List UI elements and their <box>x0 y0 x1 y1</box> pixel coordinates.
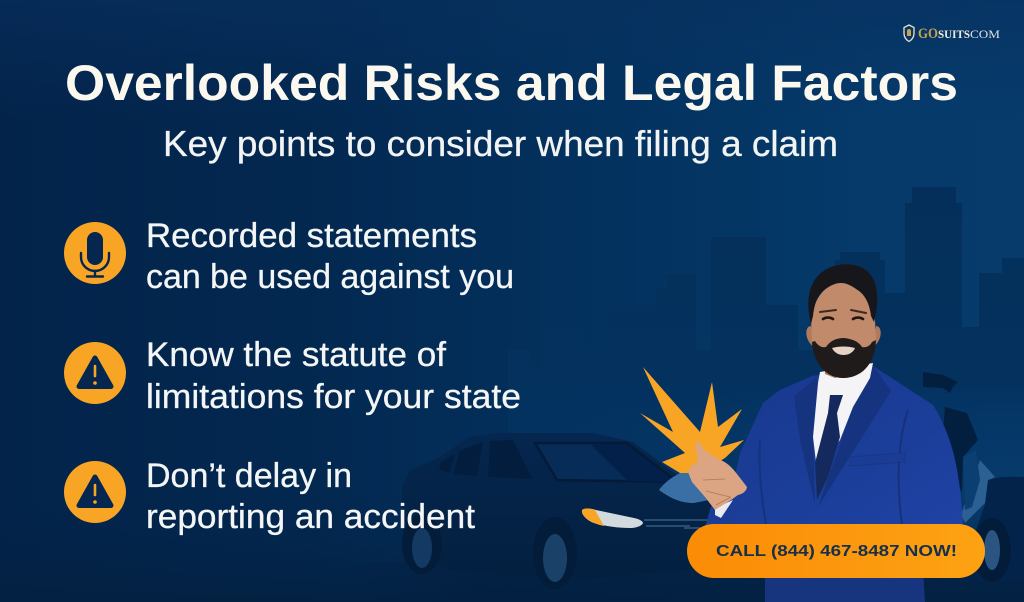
point 3 text: reporting an accident <box>146 498 476 536</box>
officer torso <box>942 407 978 493</box>
tie <box>815 395 843 500</box>
sleeve crease <box>759 410 908 525</box>
police officer and police car <box>923 372 1024 582</box>
hair <box>808 264 877 324</box>
police car body <box>972 477 1024 580</box>
suit <box>704 366 963 530</box>
officer arm <box>963 450 980 510</box>
city skyline silhouette <box>508 187 1024 500</box>
car wheels <box>402 514 577 589</box>
subtitle: Key points to consider when filing a claim <box>163 123 838 164</box>
icon: warning triangle <box>64 342 126 404</box>
point 3: reporting delay <box>64 457 476 536</box>
smile <box>832 346 855 355</box>
ears <box>806 326 881 346</box>
car headlight <box>582 508 643 528</box>
icon: microphone <box>64 222 126 284</box>
point 2: statute of limitations <box>64 336 521 416</box>
jacket pocket <box>850 453 905 466</box>
call to action button: CALL (844) 467-8487 NOW! <box>716 543 957 560</box>
hand <box>688 441 747 510</box>
car hood highlight <box>659 465 709 503</box>
point 1 text: can be used against you <box>146 258 514 296</box>
car <box>402 433 720 589</box>
face <box>811 282 876 378</box>
police car wheel <box>973 518 1011 582</box>
starburst <box>640 367 744 473</box>
icon: warning triangle <box>64 461 126 523</box>
point 1: recorded statements <box>64 217 514 296</box>
title: Overlooked Risks and Legal Factors <box>65 55 958 111</box>
point 2 text: Know the statute of <box>146 336 447 374</box>
logo: GoSuits.com <box>904 25 1000 42</box>
neck <box>824 360 865 378</box>
eyes and brows <box>823 318 863 319</box>
point 1 text: Recorded statements <box>146 217 477 255</box>
point 2 text: limitations for your state <box>146 378 521 416</box>
police car windshield <box>961 460 995 523</box>
lawyer <box>688 264 963 602</box>
point 3 text: Don’t delay in <box>146 457 352 495</box>
officer cap <box>923 372 958 393</box>
logo: GoSuits.com: SUITS <box>938 29 970 41</box>
call to action button <box>687 524 985 578</box>
lapels <box>794 365 891 507</box>
shirt <box>813 363 873 470</box>
ground shadow <box>340 562 1024 602</box>
beard <box>812 338 876 378</box>
logo: GoSuits.com: COM <box>970 29 1000 41</box>
shirt cuff <box>715 500 733 518</box>
logo: GoSuits.com: GO <box>918 26 938 42</box>
